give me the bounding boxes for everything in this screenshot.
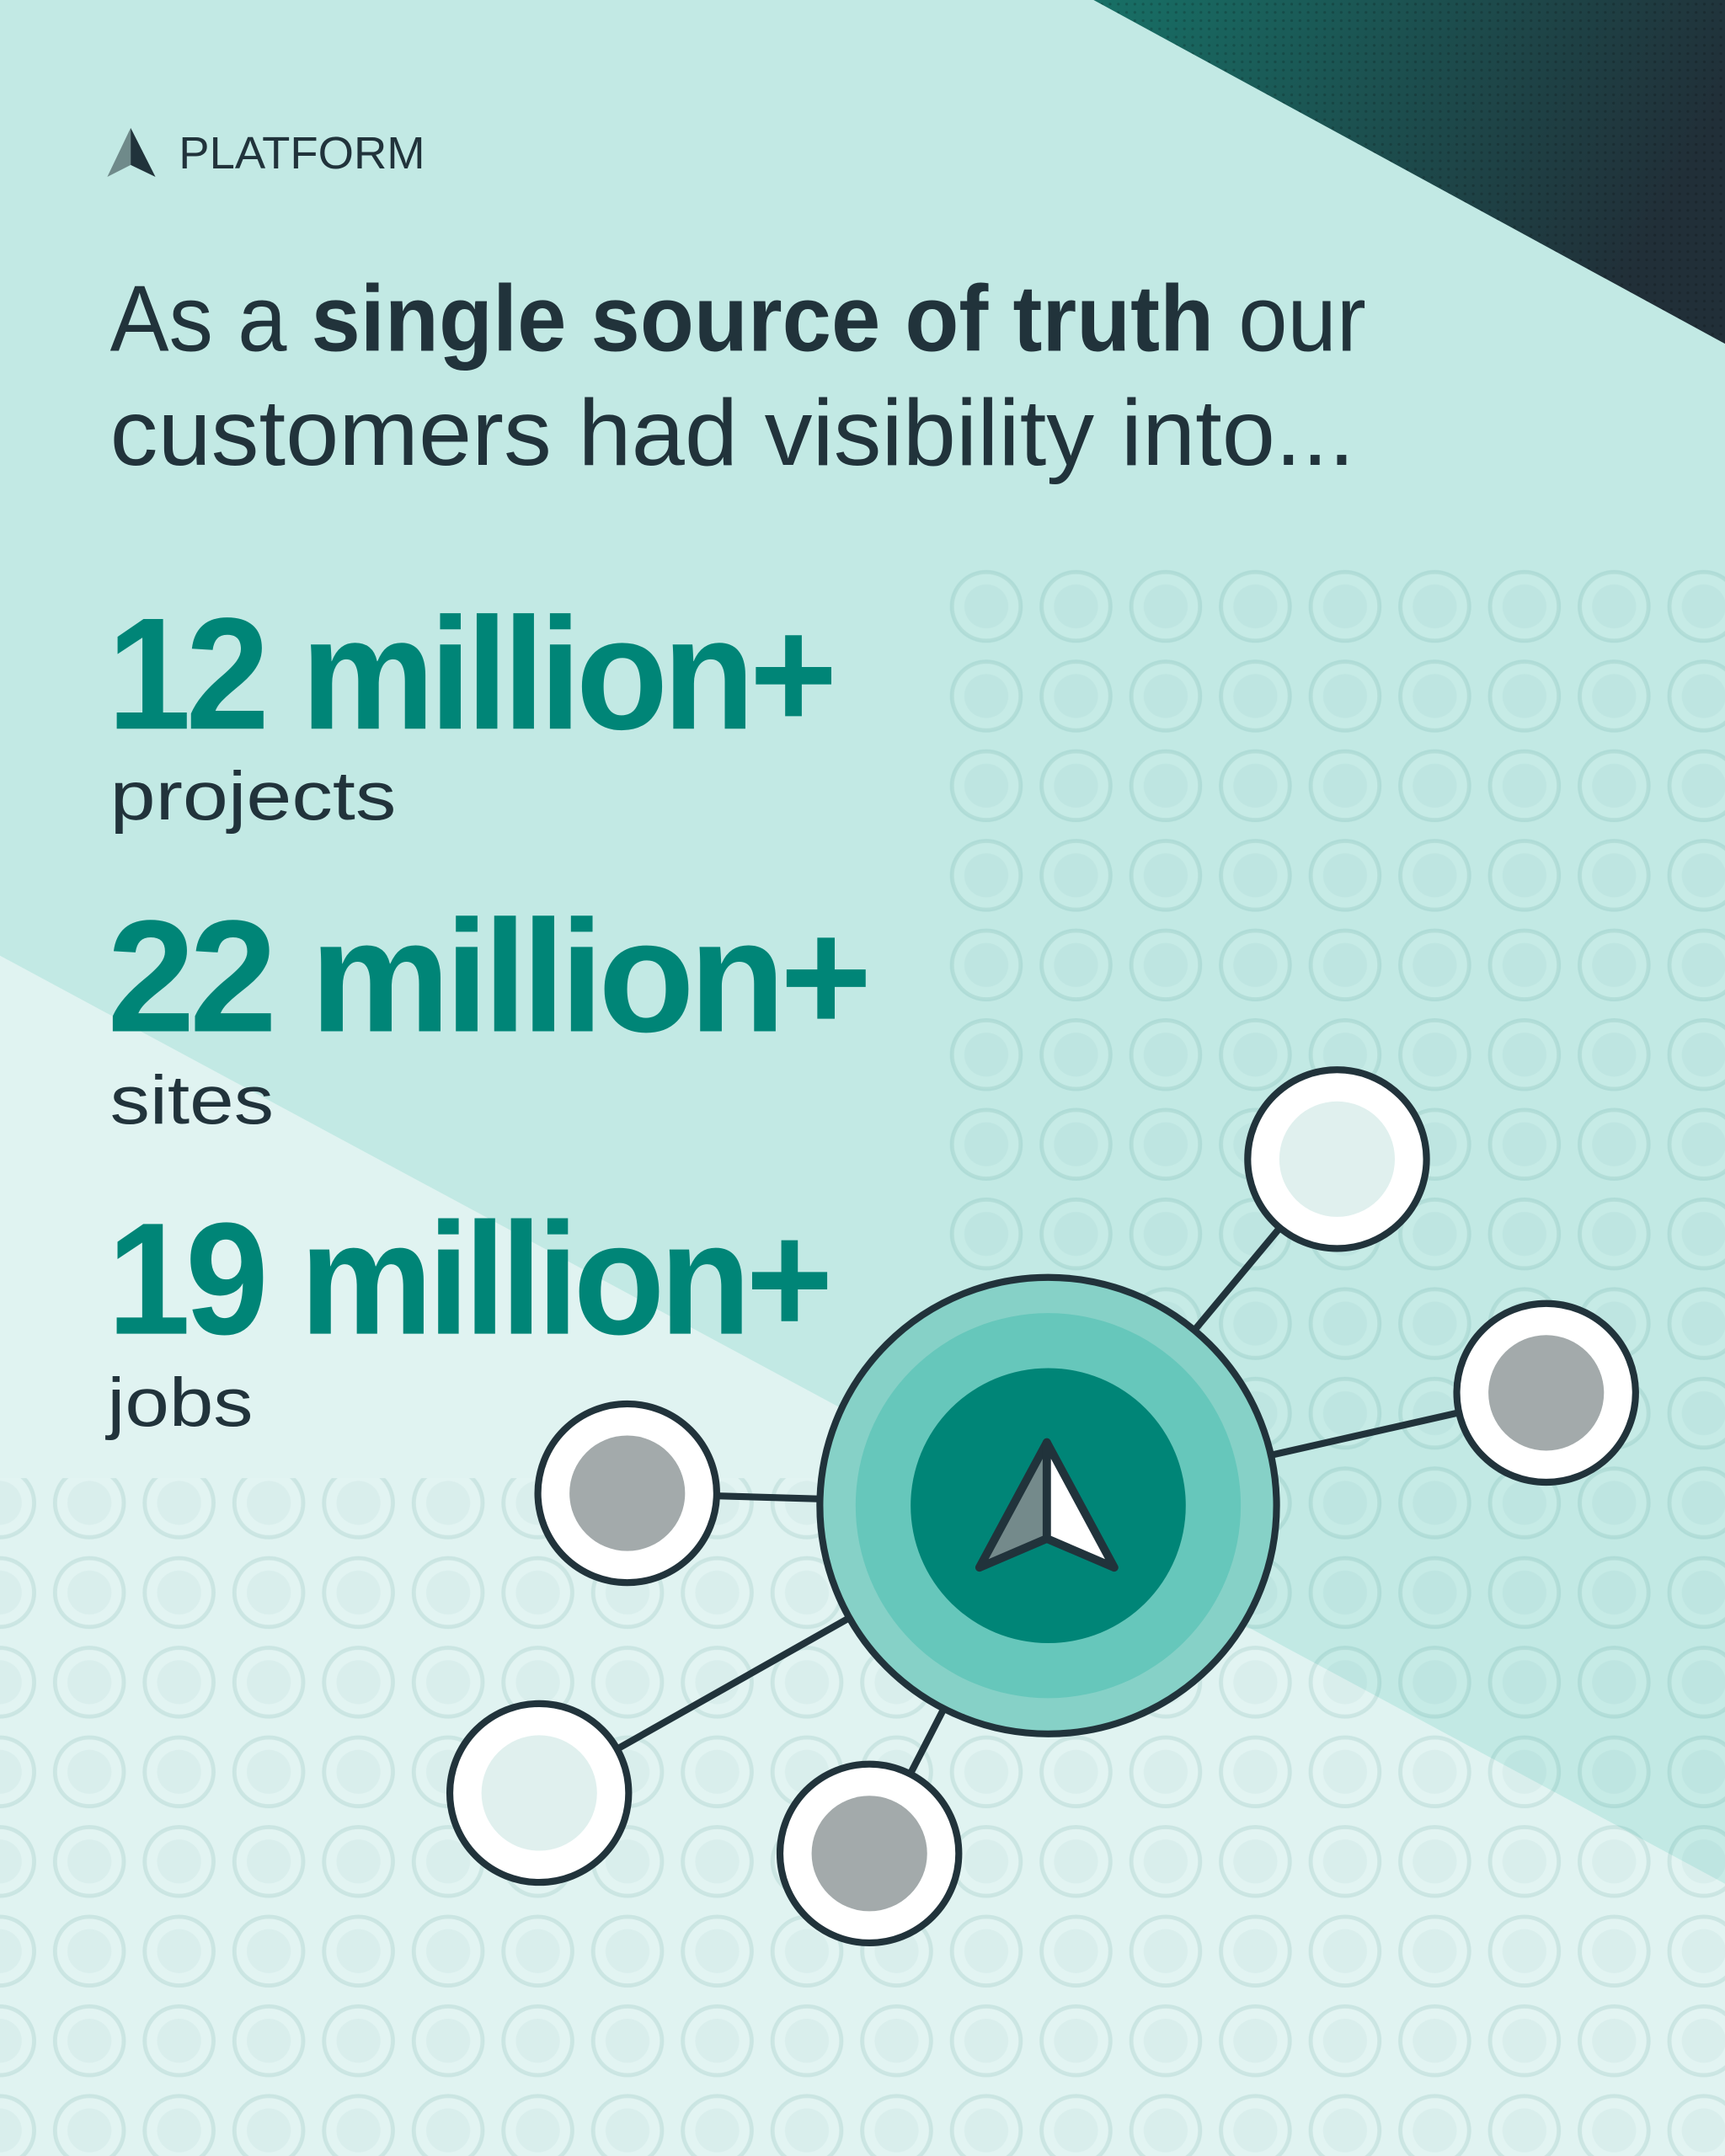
stat: jobs: jobs [105,1364,254,1441]
node: bottom gray [780,1764,959,1943]
headline [110,265,1366,485]
central hub [820,1278,1277,1734]
stat: projects: projects [110,758,396,835]
node: left gray [538,1404,717,1582]
network diagram [450,1070,1636,1943]
circle pattern [0,569,1725,2156]
stat: jobs: 19 million+ [107,1191,828,1369]
node: bottom left light [450,1704,628,1882]
stat: projects: 12 million+ [107,585,832,763]
node: top right light [1247,1070,1427,1248]
dark corner triangle [1093,0,1725,344]
stat: sites: sites [110,1062,274,1139]
stat: jobs [105,1191,828,1441]
logo: PLATFORM [179,128,425,179]
headline: As a single source of truth our [110,265,1366,371]
node: right gray [1457,1304,1636,1482]
lighter lower-left region [0,956,1725,2156]
icon: arrow [980,1443,1114,1567]
headline: customers had visibility into... [110,380,1355,485]
stat: sites: 22 million+ [107,889,867,1065]
stat: projects [107,585,832,835]
